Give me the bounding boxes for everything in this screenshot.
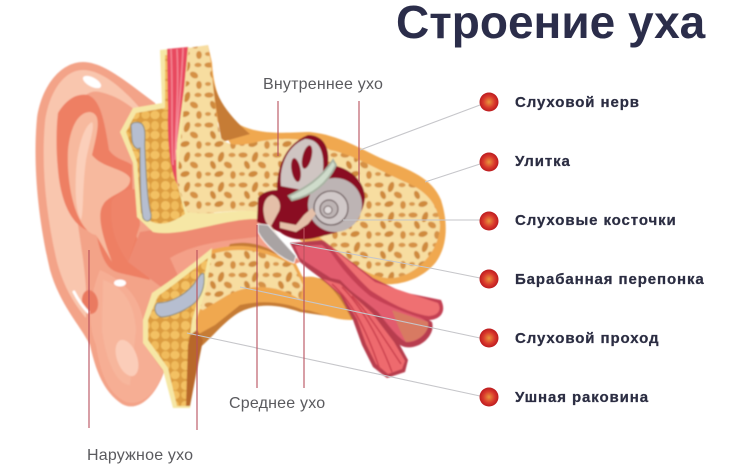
ear anatomy illustration — [36, 45, 446, 408]
grey cartilage strip lower — [155, 273, 204, 317]
upper temporal bone — [176, 45, 440, 278]
grey cartilage strip — [131, 122, 151, 221]
outer ear: pinna — [36, 62, 215, 406]
legend item: ear canal: Слуховой проход — [515, 330, 659, 347]
legend item: eardrum: Барабанная перепонка — [515, 271, 705, 288]
legend item: ossicles: Слуховые косточки — [515, 212, 677, 229]
legend item: cochlea: Улитка — [515, 153, 571, 170]
label: inner ear: Внутреннее ухо — [263, 76, 383, 93]
lower bone and brown wedge — [190, 243, 355, 350]
dark cavity — [257, 135, 365, 239]
legend item: auditory nerve: Слуховой нерв — [515, 94, 640, 111]
label: outer ear: Наружное ухо — [87, 447, 193, 464]
eustachian tube and muscles — [290, 240, 443, 378]
legend item: cochlea — [480, 152, 571, 172]
cochlea — [308, 178, 362, 232]
orange outer band and brown bone wedge — [205, 45, 446, 284]
inner ear labyrinth — [257, 135, 365, 263]
ear canal — [128, 212, 300, 296]
legend item: auricle: Ушная раковина — [515, 389, 649, 406]
legend item: auditory nerve — [480, 92, 640, 112]
upper ear canal cartilage — [120, 47, 258, 233]
label: middle ear: Среднее ухо — [229, 395, 325, 412]
red bracket lines — [89, 101, 359, 430]
lower ear canal cartilage — [143, 248, 212, 408]
auditory nerve bundle — [167, 47, 188, 184]
semicircular canals — [281, 139, 323, 190]
connector lines to labels — [187, 105, 480, 396]
eardrum — [258, 224, 296, 263]
ossicles — [264, 195, 280, 238]
